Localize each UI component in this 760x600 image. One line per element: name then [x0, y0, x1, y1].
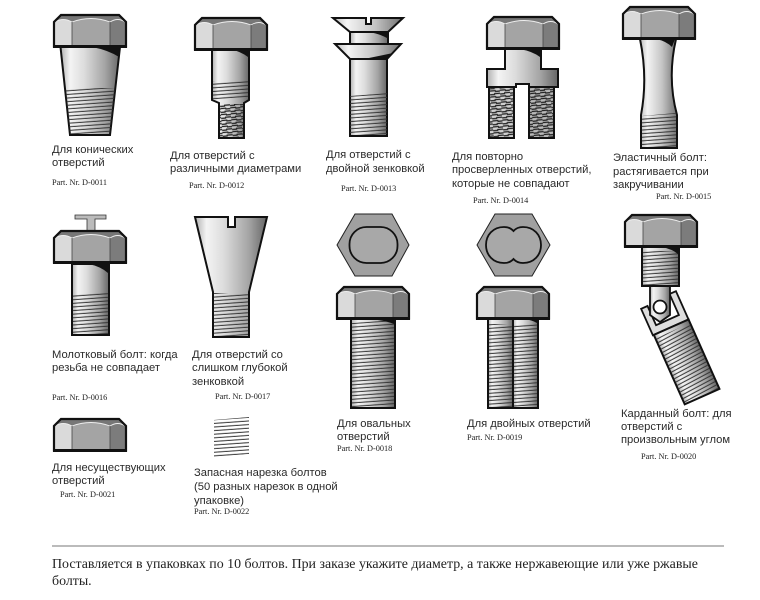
caption D-0016: Молотковый болт: когда: [52, 349, 178, 361]
caption D-0012: [170, 150, 301, 190]
caption D-0017: Part. Nr. D-0017: [215, 392, 270, 401]
caption D-0020: произвольным углом: [621, 434, 730, 446]
bolt D-0015: stretch: [622, 7, 696, 148]
caption D-0015: растягивается при: [613, 166, 709, 178]
caption D-0013: [326, 149, 425, 193]
caption D-0013: Part. Nr. D-0013: [341, 184, 396, 193]
caption D-0017: [192, 349, 288, 401]
caption D-0014: Part. Nr. D-0014: [473, 196, 529, 205]
bolt D-0016: hammer: [53, 215, 127, 335]
bolt D-0012: stepped: [194, 18, 268, 138]
caption D-0021: [52, 462, 166, 499]
caption D-0015: [613, 152, 711, 201]
caption D-0014: Для повторно: [452, 151, 523, 163]
caption D-0018: Part. Nr. D-0018: [337, 444, 392, 453]
caption D-0013: Для отверстий с: [326, 149, 411, 161]
caption D-0011: Для конических: [52, 144, 134, 156]
caption D-0011: [52, 144, 134, 187]
caption D-0019: [467, 418, 591, 442]
caption D-0012: Part. Nr. D-0012: [189, 181, 244, 190]
caption D-0011: отверстий: [52, 157, 105, 169]
caption D-0022: [194, 467, 338, 516]
caption D-0020: Карданный болт: для: [621, 408, 732, 420]
icon: hexagon with oval hole: [337, 214, 409, 276]
bolt D-0020: cardan: [624, 215, 719, 405]
caption D-0021: Part. Nr. D-0021: [60, 490, 115, 499]
footer note: [52, 557, 698, 589]
caption D-0022: Part. Nr. D-0022: [194, 507, 249, 516]
bolt D-0018: oval hole: [336, 214, 410, 408]
caption D-0016: Part. Nr. D-0016: [52, 393, 107, 402]
caption D-0020: [621, 408, 732, 461]
caption D-0020: Part. Nr. D-0020: [641, 452, 696, 461]
caption D-0021: Для несуществующих: [52, 462, 166, 474]
footer note: болты.: [52, 574, 92, 589]
icon: hexagon with double hole: [477, 214, 550, 276]
caption D-0021: отверстий: [52, 475, 105, 487]
spare threads D-0022: [214, 417, 249, 457]
caption D-0017: слишком глубокой: [192, 362, 288, 374]
caption D-0014: [452, 151, 592, 205]
caption D-0018: отверстий: [337, 431, 390, 443]
caption D-0020: отверстий с: [621, 421, 683, 433]
caption D-0022: упаковке): [194, 495, 244, 507]
bolt D-0014: forked: [486, 17, 560, 138]
caption D-0016: [52, 349, 178, 402]
bolt D-0017: deep countersink: [195, 217, 267, 337]
caption D-0019: Part. Nr. D-0019: [467, 433, 522, 442]
bolt D-0019: double hole: [476, 214, 550, 408]
caption D-0017: Для отверстий со: [192, 349, 283, 361]
caption D-0015: закручивании: [613, 179, 684, 191]
caption D-0018: Для овальных: [337, 418, 411, 430]
caption D-0015: Эластичный болт:: [613, 152, 707, 164]
caption D-0013: двойной зенковкой: [326, 163, 425, 175]
caption D-0017: зенковкой: [192, 376, 244, 388]
caption D-0016: резьба не совпадает: [52, 362, 160, 374]
bolt D-0013: double countersink: [333, 18, 403, 136]
caption D-0019: Для двойных отверстий: [467, 418, 591, 430]
caption D-0022: Запасная нарезка болтов: [194, 467, 327, 479]
bolt D-0021: head only: [53, 419, 127, 452]
footer note: Поставляется в упаковках по 10 болтов. При заказе укажите диаметр, а также нержавеющие или уже ржавые: [52, 557, 698, 572]
caption D-0012: Для отверстий с: [170, 150, 255, 162]
caption D-0014: просверленных отверстий,: [452, 164, 592, 176]
caption D-0022: (50 разных нарезок в одной: [194, 481, 338, 493]
caption D-0011: Part. Nr. D-0011: [52, 178, 107, 187]
caption D-0014: которые не совпадают: [452, 178, 570, 190]
caption D-0018: [337, 418, 411, 453]
caption D-0015: Part. Nr. D-0015: [656, 192, 711, 201]
bolt D-0011: tapered: [53, 15, 127, 135]
caption D-0012: различными диаметрами: [170, 163, 301, 175]
